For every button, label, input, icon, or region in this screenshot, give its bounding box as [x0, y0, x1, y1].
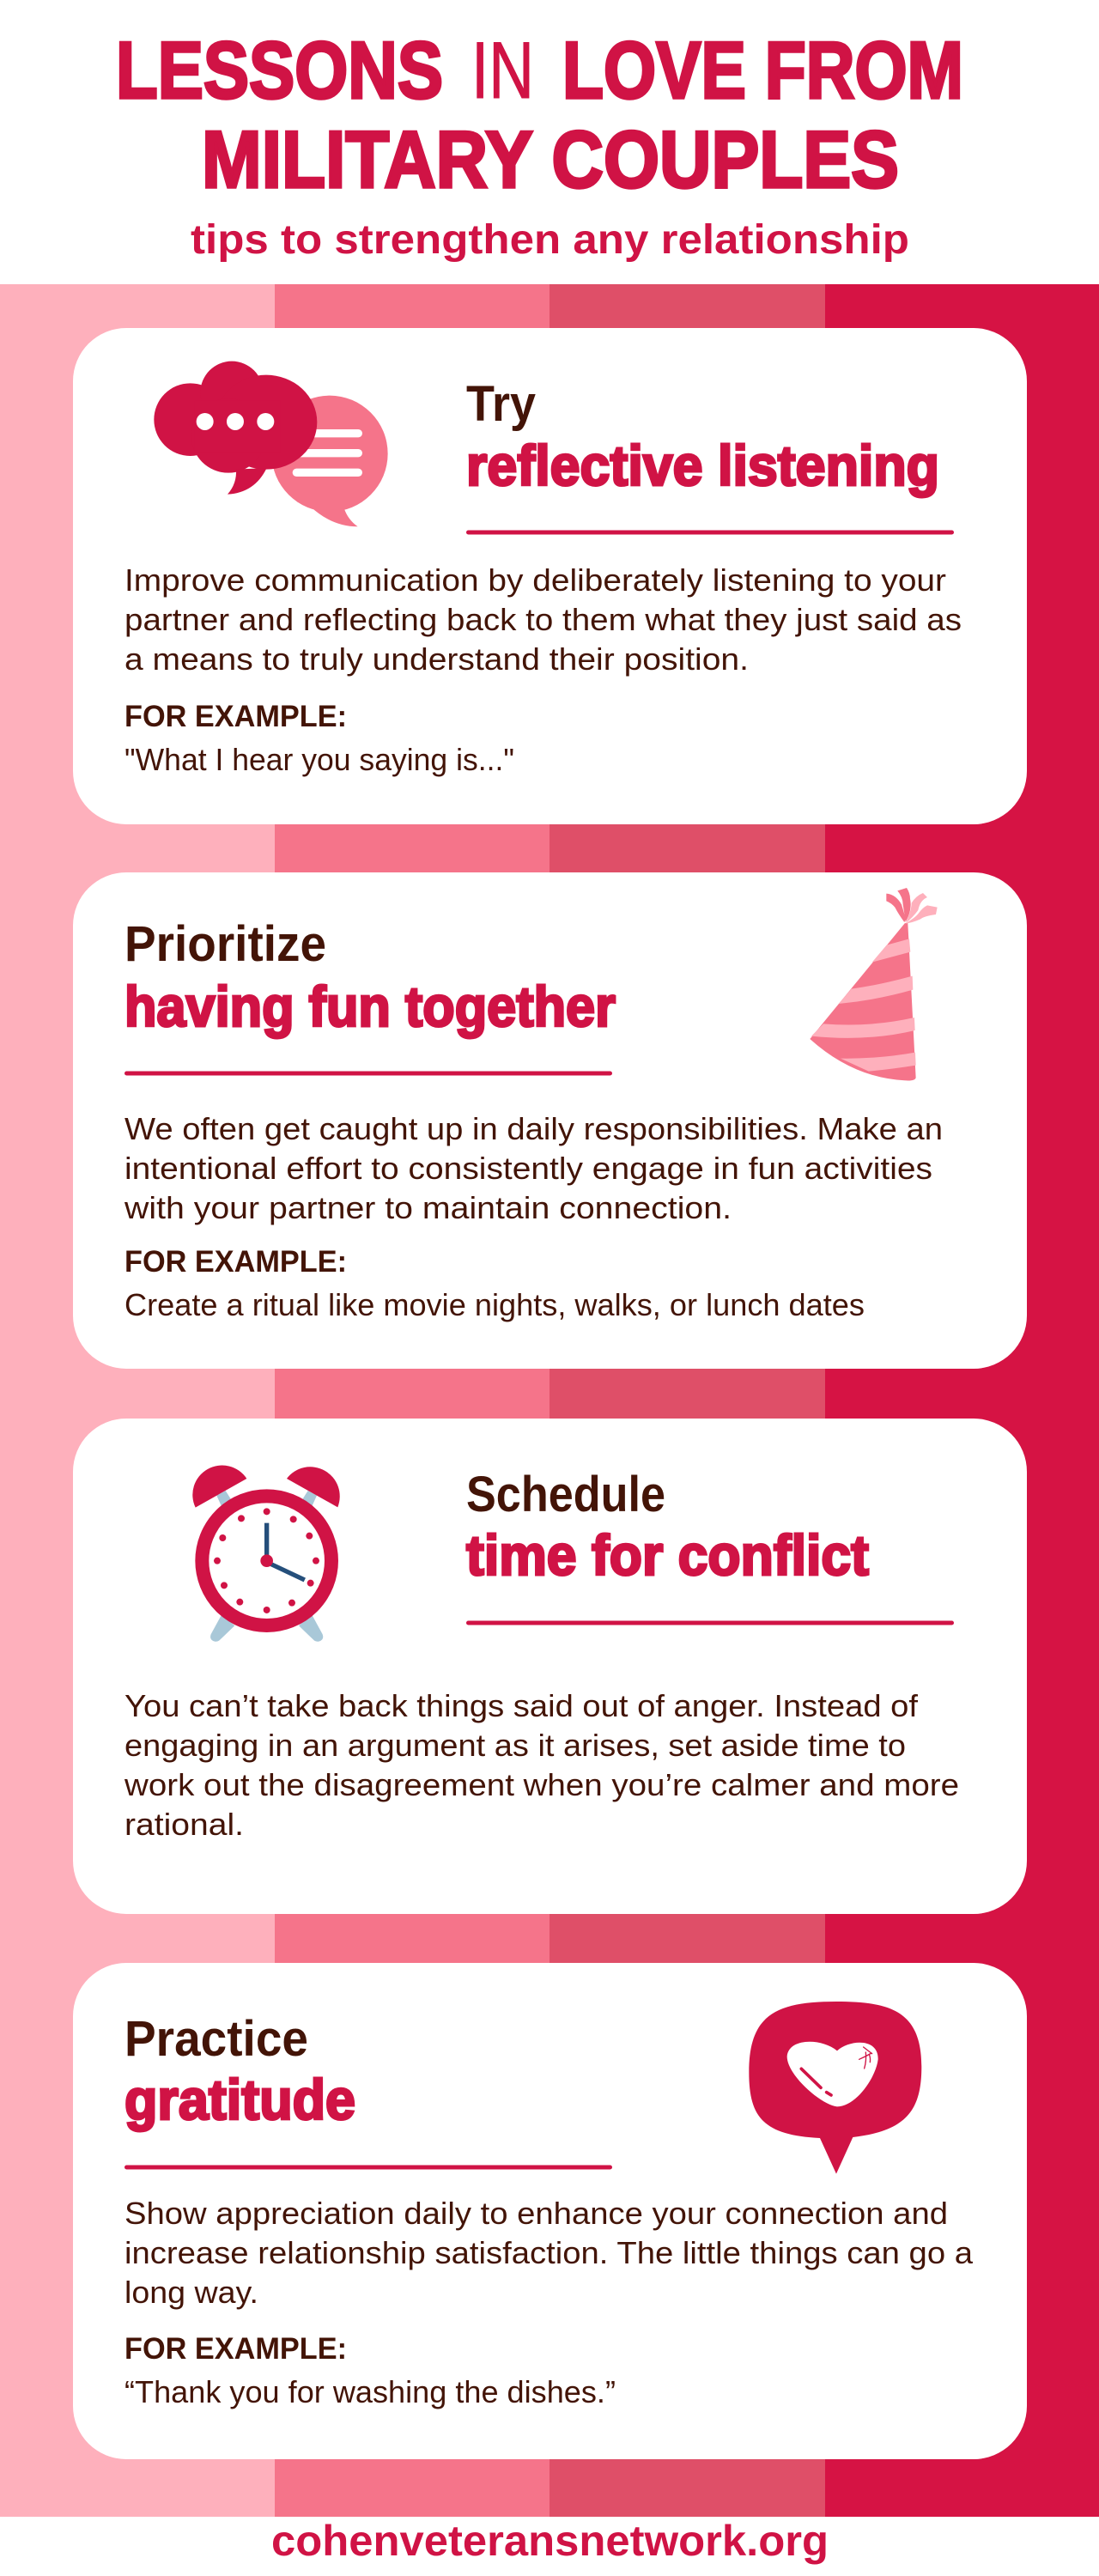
heading: Practice: Practice [124, 2011, 308, 2067]
body text: long way. [124, 2275, 258, 2310]
body text: Show appreciation daily to enhance your connection and [124, 2196, 948, 2231]
body text [124, 1688, 959, 1842]
body text [124, 1111, 943, 1225]
example: "What I hear you saying is..." [124, 742, 514, 777]
icon: heart speech bubble [749, 2002, 921, 2174]
title: IN [471, 25, 534, 115]
icon: alarm clock [192, 1466, 340, 1642]
body text: rational. [124, 1807, 244, 1842]
icon: speech bubbles [154, 361, 388, 526]
heading: reflective listening: reflective listening [466, 434, 939, 497]
example: “Thank you for washing the dishes.” [124, 2374, 616, 2409]
example [124, 2332, 616, 2409]
title: MILITARY COUPLES [202, 114, 899, 204]
body text: intentional effort to consistently engage in fun activities [124, 1151, 932, 1186]
body text: work out the disagreement when you’re calmer and more [124, 1767, 959, 1802]
example [124, 700, 514, 777]
example: FOR EXAMPLE: [124, 700, 347, 733]
heading: Schedule: Schedule [466, 1467, 665, 1522]
body text: You can’t take back things said out of anger. Instead of [124, 1688, 919, 1723]
body text: partner and reflecting back to them what they just said as [124, 602, 962, 637]
subtitle: tips to strengthen any relationship [191, 217, 909, 263]
heading: time for conflict: time for conflict [466, 1523, 869, 1587]
heading: gratitude: gratitude [124, 2068, 355, 2131]
panel: gratitude [73, 1963, 1027, 2459]
example: FOR EXAMPLE: [124, 1245, 347, 1279]
body text: Improve communication by deliberately listening to your [124, 562, 946, 598]
body text: with your partner to maintain connection. [124, 1190, 732, 1225]
body text: We often get caught up in daily responsibilities. Make an [124, 1111, 943, 1146]
body text: engaging in an argument as it arises, set aside time to [124, 1728, 906, 1763]
example [124, 1245, 865, 1322]
icon: party hat [810, 888, 938, 1080]
example: FOR EXAMPLE: [124, 2332, 347, 2366]
heading: Prioritize: Prioritize [124, 916, 326, 972]
body text [124, 2196, 974, 2310]
heading: Try: Try [466, 376, 536, 432]
heading: having fun together: having fun together [124, 975, 616, 1038]
title: LESSONS [116, 25, 443, 115]
example: Create a ritual like movie nights, walks, or lunch dates [124, 1287, 865, 1322]
body text: a means to truly understand their position. [124, 641, 749, 677]
footer url: cohenveteransnetwork.org [271, 2517, 829, 2565]
body text: increase relationship satisfaction. The little things can go a [124, 2235, 974, 2270]
title [116, 25, 963, 204]
panel: having fun together [73, 872, 1027, 1369]
body text [124, 562, 962, 677]
panel: reflective listening [73, 328, 1027, 824]
panel: time for conflict [73, 1419, 1027, 1914]
title: LOVE FROM [562, 25, 963, 115]
